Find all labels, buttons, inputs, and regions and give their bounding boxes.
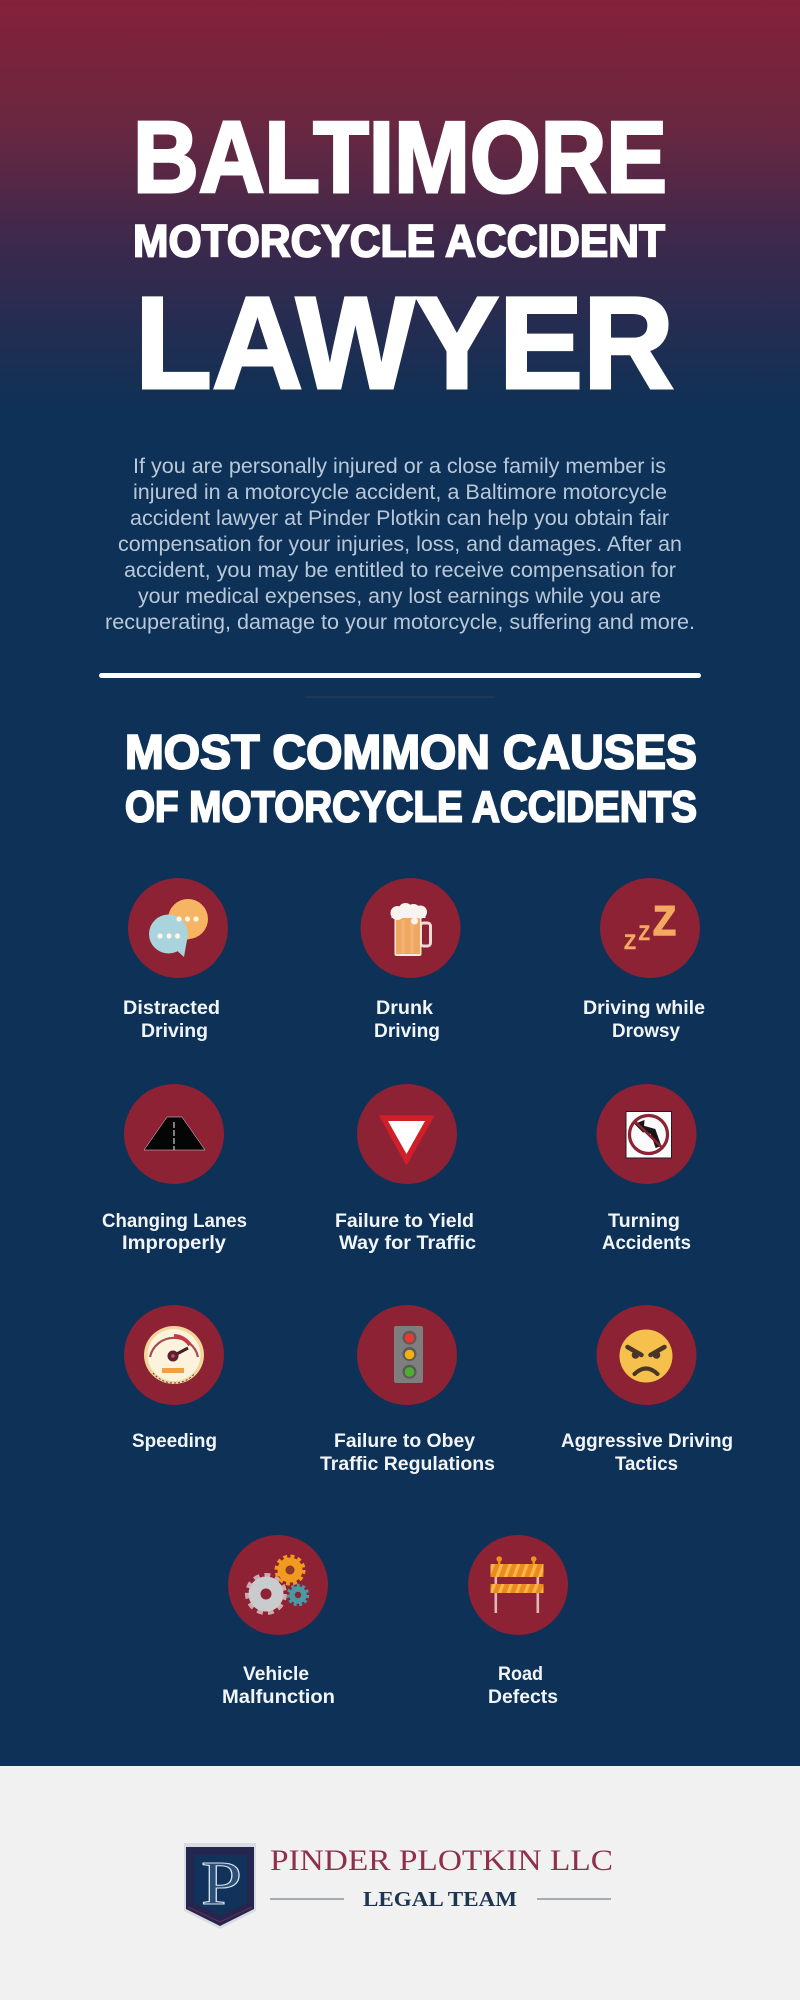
label: Turning — [608, 1211, 680, 1232]
icon: zzz: Z — [638, 922, 650, 945]
title — [133, 102, 674, 416]
icon: angry face — [596, 1305, 696, 1405]
label: Improperly — [122, 1233, 226, 1254]
logo wordmark: PINDER PLOTKIN LLC — [270, 1844, 613, 1877]
icon: speedometer — [124, 1305, 224, 1405]
intro paragraph: accident, you may be entitled to receive compensation for — [124, 559, 676, 582]
label: Failure to Obey — [334, 1431, 475, 1452]
icon: zzz: Z — [624, 931, 636, 954]
label — [602, 1211, 691, 1254]
icon: speech bubbles — [128, 878, 228, 978]
label: Accidents — [602, 1233, 691, 1254]
label: Changing Lanes — [102, 1211, 247, 1232]
intro paragraph: your medical expenses, any lost earnings while you are — [138, 585, 661, 608]
label: Traffic Regulations — [320, 1454, 495, 1475]
icon: beer mug — [360, 878, 460, 978]
cause: Vehicle Malfunction — [222, 1535, 335, 1708]
logo wordmark: LEGAL TEAM — [363, 1887, 517, 1911]
label: Drowsy — [612, 1021, 680, 1042]
label: Road — [498, 1664, 543, 1685]
icon: no left turn sign — [596, 1084, 696, 1184]
label — [102, 1211, 247, 1254]
label — [561, 1431, 733, 1475]
icon: road barrier — [468, 1535, 568, 1635]
label: Failure to Yield — [335, 1211, 474, 1232]
label — [488, 1664, 558, 1708]
intro paragraph: injured in a motorcycle accident, a Baltimore motorcycle — [133, 481, 667, 504]
label — [374, 998, 440, 1042]
label — [335, 1211, 476, 1254]
icon: gears — [228, 1535, 328, 1635]
label: Driving — [141, 1021, 208, 1042]
intro paragraph: accident lawyer at Pinder Plotkin can help you obtain fair — [130, 507, 669, 530]
cause: Speeding — [124, 1305, 224, 1452]
label: Speeding — [132, 1431, 217, 1452]
icon: road — [124, 1084, 224, 1184]
label: Tactics — [615, 1454, 678, 1475]
icon: traffic light — [357, 1305, 457, 1405]
icon: zzz — [600, 878, 700, 978]
cause: Changing Lanes Improperly — [102, 1084, 247, 1254]
logo wordmark — [270, 1844, 613, 1911]
logo shield — [184, 1843, 256, 1929]
section heading: OF MOTORCYCLE ACCIDENTS — [125, 782, 697, 832]
cause: Aggressive Driving Tactics — [561, 1305, 733, 1475]
label: Aggressive Driving — [561, 1431, 733, 1452]
label: Malfunction — [222, 1687, 335, 1708]
intro paragraph: If you are personally injured or a close family member is — [133, 455, 666, 478]
cause: Turning Accidents — [596, 1084, 696, 1254]
title: LAWYER — [135, 269, 674, 416]
section heading — [125, 726, 697, 832]
label: Distracted — [123, 998, 220, 1019]
panel: footer — [0, 1766, 800, 2000]
label: Driving — [374, 1021, 440, 1042]
label — [123, 998, 220, 1042]
intro paragraph — [105, 455, 695, 634]
icon: zzz: Z — [653, 897, 676, 944]
cause: Driving while Drowsy — [583, 878, 705, 1042]
label — [583, 998, 705, 1042]
header gradient — [0, 0, 800, 415]
cause: Drunk Driving — [360, 878, 460, 1042]
icon: yield sign — [357, 1084, 457, 1184]
cause: Road Defects — [468, 1535, 568, 1708]
cause: Failure to Obey Traffic Regulations — [320, 1305, 495, 1475]
label — [222, 1664, 335, 1708]
cause: Failure to Yield Way for Traffic — [335, 1084, 476, 1254]
cause: Distracted Driving — [123, 878, 228, 1042]
title: BALTIMORE — [133, 102, 667, 214]
intro paragraph: recuperating, damage to your motorcycle, suffering and more. — [105, 611, 695, 634]
label: Driving while — [583, 998, 705, 1019]
label: Vehicle — [243, 1664, 309, 1685]
logo shield: P — [201, 1850, 242, 1918]
intro paragraph: compensation for your injuries, loss, and damages. After an — [118, 533, 682, 556]
label: Way for Traffic — [339, 1233, 476, 1254]
label — [320, 1431, 495, 1475]
label: Defects — [488, 1687, 558, 1708]
section heading: MOST COMMON CAUSES — [125, 726, 697, 780]
label: Drunk — [376, 998, 433, 1019]
title: MOTORCYCLE ACCIDENT — [133, 216, 665, 266]
